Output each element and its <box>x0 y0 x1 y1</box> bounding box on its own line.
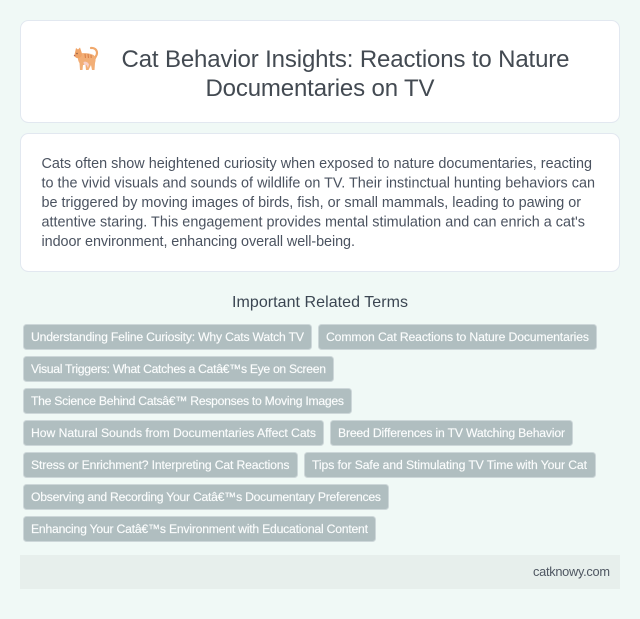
text block: description <box>42 156 595 250</box>
tag: Observing and Recording Your Catâ€™s Documentary Preferences <box>31 490 381 504</box>
text block: description: be triggered by moving images of birds, fish, or small mammals, leading to pawing or <box>42 195 581 211</box>
footer <box>20 555 620 589</box>
tag: How Natural Sounds from Documentaries Affect Cats <box>31 426 316 440</box>
tag <box>330 420 572 446</box>
tag: The Science Behind Catsâ€™ Responses to Moving Images <box>31 394 344 408</box>
panel: description <box>20 134 620 272</box>
tag <box>304 452 596 478</box>
footer: catknowy.com <box>533 564 610 579</box>
text block: description: to the vivid visuals and sounds of wildlife on TV. Their instinctual hunting behaviors can <box>42 176 595 192</box>
tag <box>24 516 376 542</box>
tag <box>24 324 312 350</box>
tag list <box>24 324 596 542</box>
tag <box>24 484 388 510</box>
tag: Tips for Safe and Stimulating TV Time with Your Cat <box>312 458 588 472</box>
tag: Visual Triggers: What Catches a Catâ€™s Eye on Screen <box>31 362 326 376</box>
tag: Understanding Feline Curiosity: Why Cats Watch TV <box>31 330 305 344</box>
title: Cat Behavior Insights: Reactions to Nature <box>122 46 570 73</box>
panel: title card <box>20 20 620 122</box>
icon: cat <box>74 48 97 70</box>
tag: Enhancing Your Catâ€™s Environment with Educational Content <box>31 522 369 536</box>
tag <box>24 452 298 478</box>
tag: Common Cat Reactions to Nature Documentaries <box>326 330 589 344</box>
text block: description: Cats often show heightened curiosity when exposed to nature documentaries, reacting <box>42 156 592 172</box>
title <box>122 46 570 102</box>
heading: related terms: Important Related Terms <box>232 294 408 311</box>
tag: Stress or Enrichment? Interpreting Cat Reactions <box>31 458 290 472</box>
title: Documentaries on TV <box>206 75 434 102</box>
text block: description: attentive staring. This engagement provides mental stimulation and can enrich a cat's <box>42 214 585 230</box>
tag <box>24 388 352 414</box>
tag <box>24 356 334 382</box>
tag <box>318 324 596 350</box>
tag: Breed Differences in TV Watching Behavior <box>338 426 565 440</box>
tag <box>24 420 324 446</box>
text block: description: indoor environment, enhancing overall well-being. <box>42 234 355 250</box>
